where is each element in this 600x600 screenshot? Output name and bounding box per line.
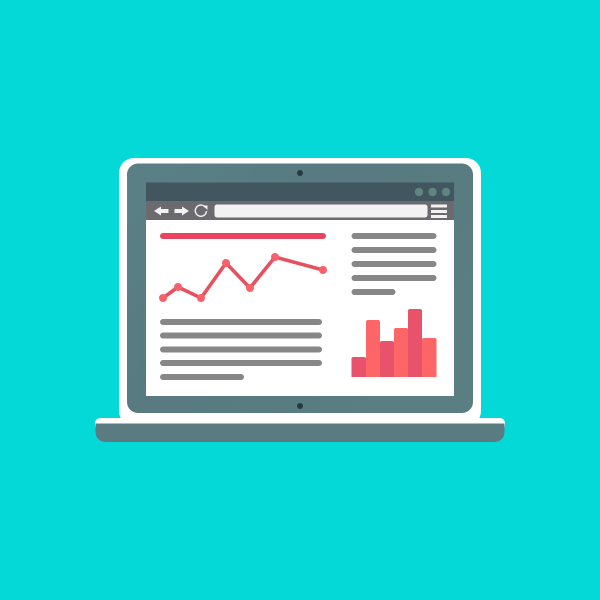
icon: menu	[431, 204, 447, 218]
icon: forward arrow	[174, 206, 189, 216]
laptop	[95, 158, 505, 442]
browser toolbar	[146, 201, 454, 220]
line chart	[159, 253, 327, 302]
webcam top	[297, 170, 303, 176]
text lines left	[160, 319, 322, 380]
address bar	[214, 204, 428, 218]
bar chart	[352, 309, 436, 377]
window control dots	[415, 188, 450, 196]
text lines right	[352, 233, 436, 295]
webcam bottom	[297, 403, 303, 409]
browser window	[146, 182, 454, 396]
icon: reload	[195, 205, 208, 216]
browser title bar	[146, 182, 454, 201]
laptop white outline	[119, 158, 481, 426]
base white top edge	[95, 418, 505, 430]
icon: back arrow	[154, 206, 168, 216]
heading bar	[160, 233, 326, 239]
laptop base	[95, 418, 505, 442]
page content area	[146, 220, 454, 396]
laptop lid bezel	[127, 164, 473, 413]
base body	[96, 424, 504, 442]
